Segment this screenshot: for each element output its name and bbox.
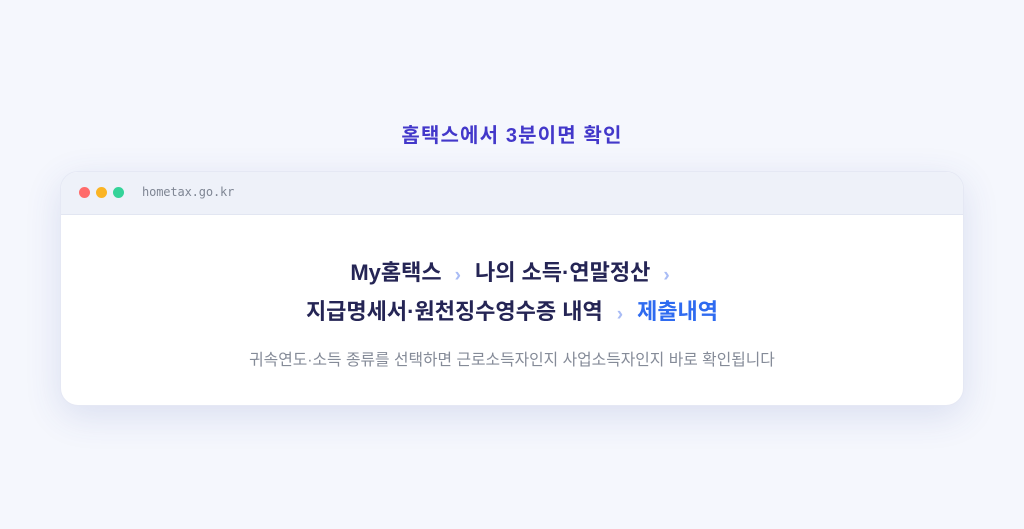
description text: 귀속연도·소득 종류를 선택하면 근로소득자인지 사업소득자인지 바로 확인됩니다 — [249, 352, 775, 369]
browser toolbar — [61, 172, 963, 215]
icon: yellow window dot — [96, 187, 107, 198]
address text: hometax.go.kr — [142, 185, 234, 199]
title: 홈택스에서 3분이면 확인 — [401, 125, 623, 147]
icon: red window dot — [79, 187, 90, 198]
icon: green window dot — [113, 187, 124, 198]
breadcrumb line 2: 지급명세서·원천징수영수증 내역 › 제출내역 — [306, 299, 718, 325]
panel: browser window — [60, 171, 964, 406]
breadcrumb line 1: My홈택스 › 나의 소득·연말정산 › — [350, 260, 670, 286]
